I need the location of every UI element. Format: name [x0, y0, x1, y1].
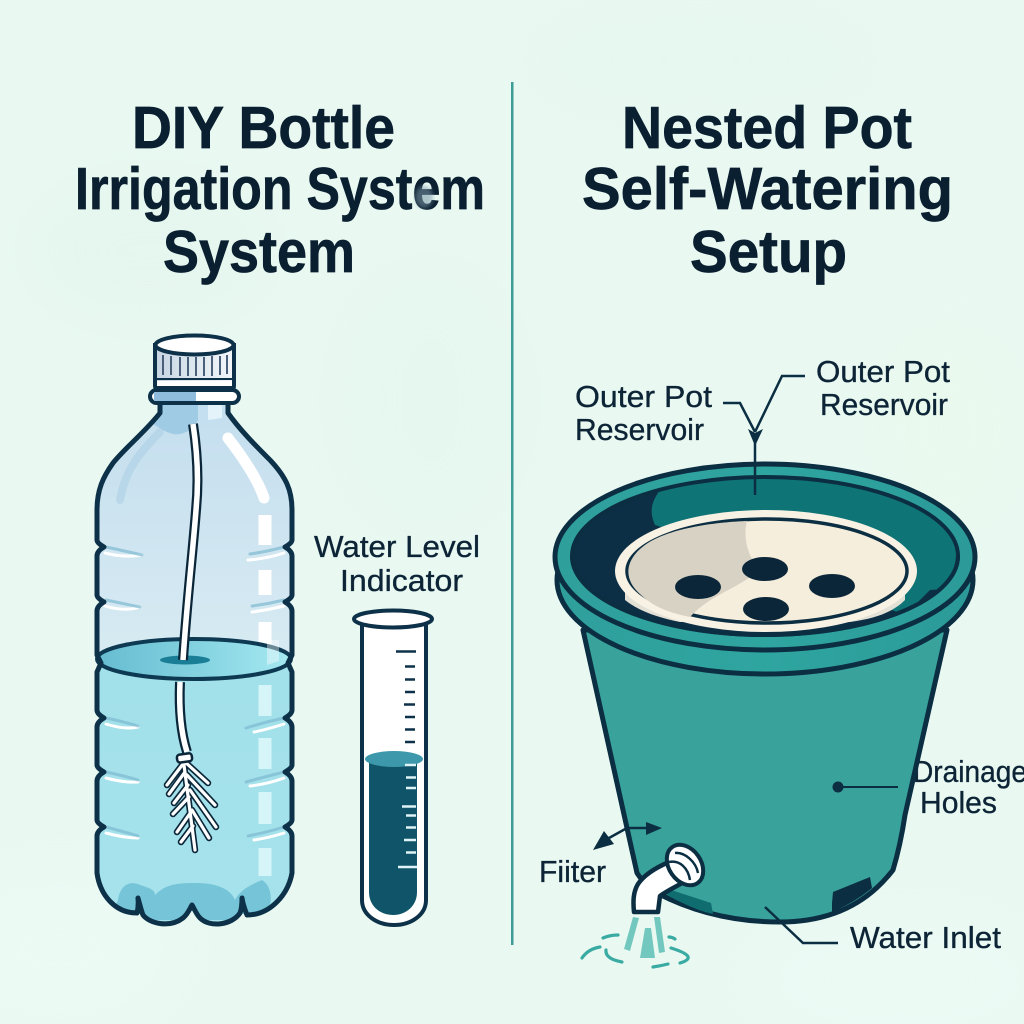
title: Nested Pot Self-Watering Setup: Setup — [690, 219, 847, 285]
label: outer pot reservoir right: Outer Pot — [816, 354, 950, 389]
front rim stripe — [572, 556, 958, 635]
label: drainage holes — [913, 754, 1024, 820]
label: filter: Fiiter — [539, 854, 606, 889]
icon: faucet with water — [582, 838, 711, 967]
flange — [659, 838, 711, 892]
wick tube — [180, 424, 197, 752]
bottle outline — [97, 402, 292, 924]
title: DIY Bottle Irrigation System: Irrigation System — [75, 156, 485, 222]
icon: nested pot — [555, 450, 1000, 922]
label: outer pot reservoir left — [575, 379, 712, 447]
pipe — [633, 862, 687, 912]
centre divider — [511, 82, 514, 945]
title: Nested Pot Self-Watering Setup: Self-Watering — [582, 156, 953, 222]
label: water level indicator: Water Level — [314, 529, 480, 564]
lower rim band — [557, 486, 973, 674]
label: outer pot reservoir right — [816, 354, 950, 422]
label: outer pot reservoir right: Reservoir — [820, 387, 948, 422]
label: outer pot reservoir left: Outer Pot — [575, 379, 712, 414]
title: DIY Bottle Irrigation System — [75, 95, 485, 285]
base notches — [832, 877, 872, 912]
collar — [150, 390, 239, 403]
bottle body contents — [100, 405, 290, 922]
upper rim — [555, 464, 975, 650]
wick brush — [167, 753, 216, 850]
label: water level indicator — [314, 529, 480, 598]
water stream — [624, 917, 665, 958]
title: DIY Bottle Irrigation System: System — [163, 219, 355, 285]
pot opening — [572, 477, 958, 635]
icon: plastic bottle with wick — [90, 336, 300, 939]
label: drainage holes: Holes — [920, 785, 997, 820]
bottle cap — [155, 336, 234, 388]
water ripples — [582, 935, 688, 967]
drainage holes — [742, 557, 788, 581]
scale ticks — [396, 652, 416, 742]
icon: graduated test tube — [354, 610, 432, 925]
title: DIY Bottle Irrigation System: DIY Bottle — [132, 95, 395, 161]
title: Nested Pot Self-Watering Setup — [582, 95, 953, 285]
pointer: water inlet — [765, 907, 838, 943]
pot body — [583, 630, 947, 922]
title: Nested Pot Self-Watering Setup: Nested Pot — [622, 95, 912, 161]
arrow: filter — [593, 822, 662, 850]
inner pot disc — [625, 585, 905, 622]
label: outer pot reservoir left: Reservoir — [575, 412, 704, 447]
water surface — [97, 639, 291, 679]
label: water inlet: Water Inlet — [850, 920, 1001, 955]
bottle highlights — [105, 432, 284, 876]
label: water level indicator: Indicator — [340, 563, 463, 598]
pointer: drainage holes — [832, 782, 898, 792]
arrow: reservoir leader lines — [723, 376, 805, 495]
